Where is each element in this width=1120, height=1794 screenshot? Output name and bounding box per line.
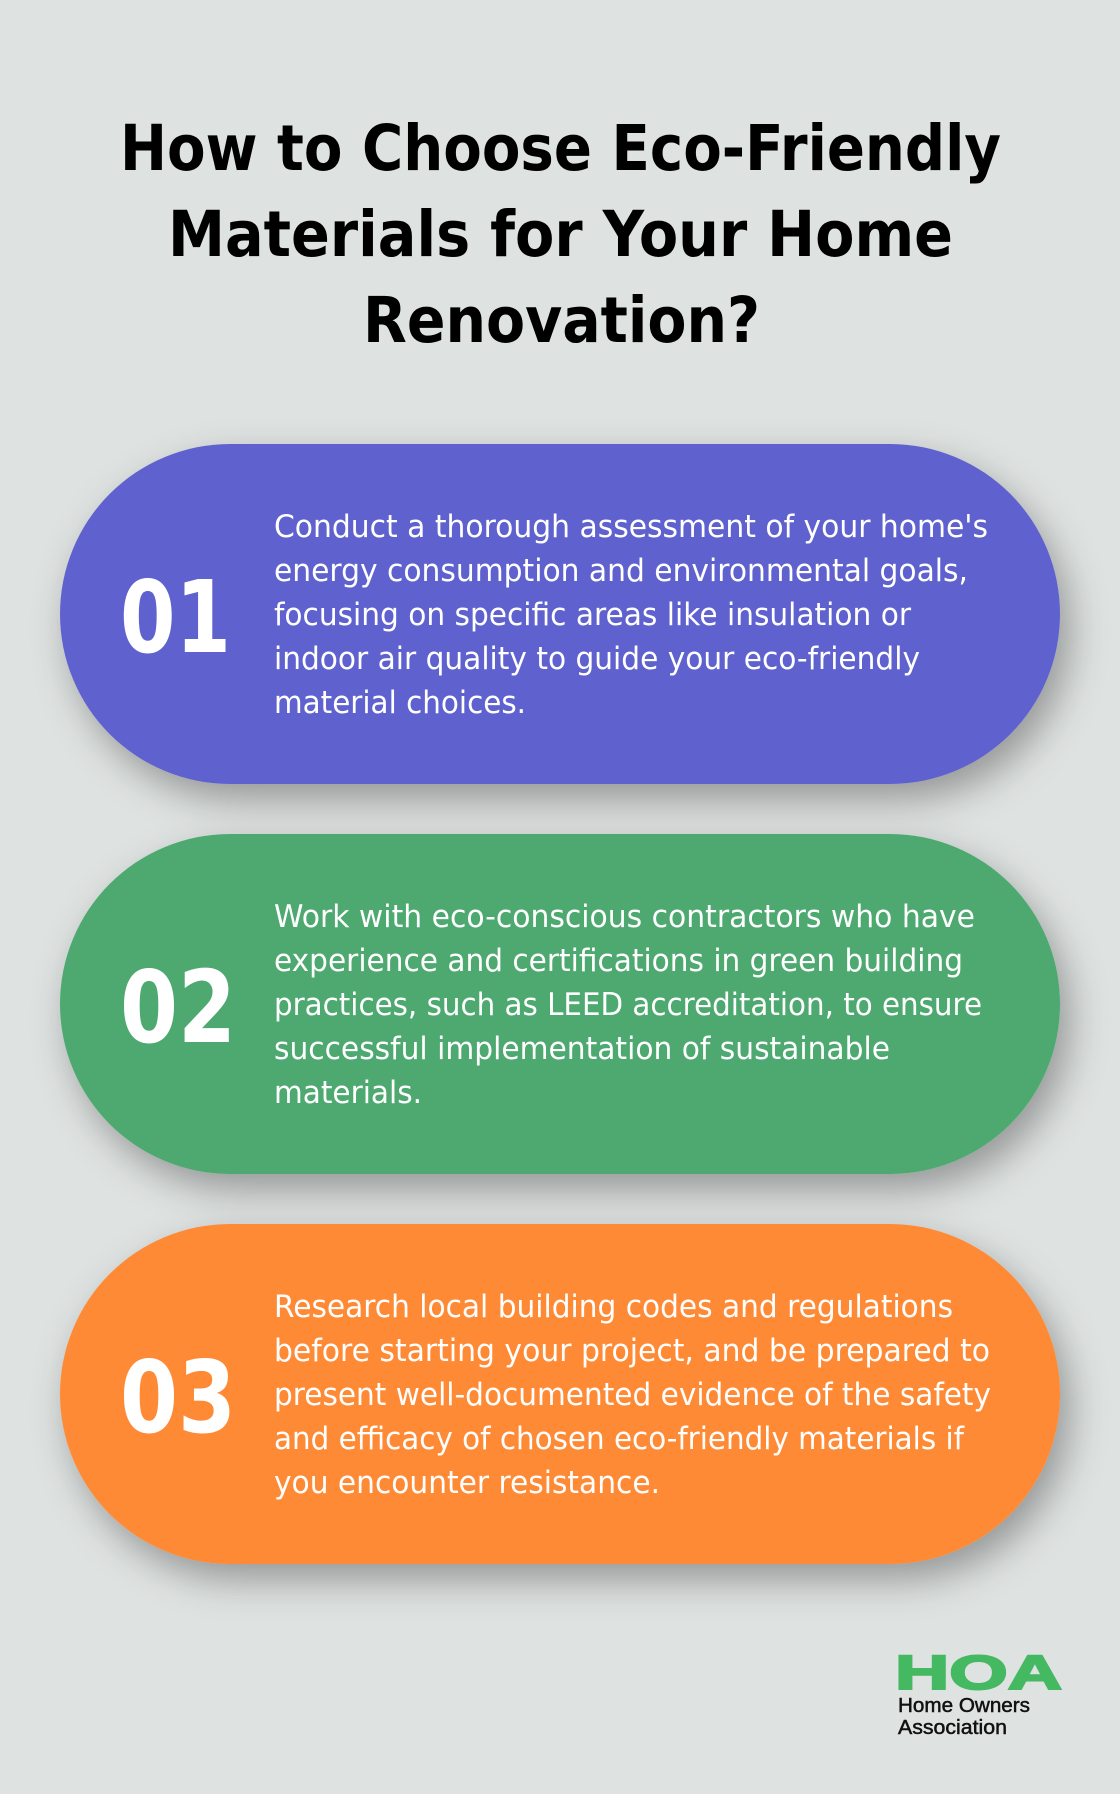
text: step 02 description: materials.: [274, 1075, 422, 1111]
text: step 03 description: and efficacy of chosen eco-friendly materials if: [274, 1421, 965, 1457]
text: step 03 description: present well-documented evidence of the safety: [274, 1377, 991, 1413]
text: step 01 description: energy consumption and environmental goals,: [274, 553, 968, 589]
panel: step 01: [60, 444, 1060, 784]
text: step 02 description: practices, such as LEED accreditation, to ensure: [274, 987, 982, 1023]
pill background: step 02: [60, 834, 1060, 1174]
panel: step 03: [60, 1224, 1060, 1564]
title: [120, 112, 1001, 357]
text: step 03 description: before starting your project, and be prepared to: [274, 1333, 990, 1369]
text: step 02 description: experience and certifications in green building: [274, 943, 963, 979]
text: step 03 description: Research local building codes and regulations: [274, 1289, 953, 1325]
title: Materials for Your Home: [168, 198, 953, 271]
number: 01: 01: [120, 559, 231, 676]
number: 02: 02: [120, 949, 236, 1066]
text: step 03 description: [274, 1289, 991, 1501]
text: step 01 description: [274, 509, 988, 721]
text: step 01 description: focusing on specific areas like insulation or: [274, 597, 911, 633]
text: step 01 description: material choices.: [274, 685, 526, 721]
logo: HOA Home Owners Association: Association: [898, 1717, 1007, 1739]
text: step 03 description: you encounter resistance.: [274, 1465, 660, 1501]
text: step 02 description: Work with eco-conscious contractors who have: [274, 899, 975, 935]
text: step 02 description: [274, 899, 982, 1111]
pill background: step 03: [60, 1224, 1060, 1564]
text: step 01 description: Conduct a thorough assessment of your home's: [274, 509, 988, 545]
title: Renovation?: [363, 284, 760, 357]
panel: step 02: [60, 834, 1060, 1174]
text: step 02 description: successful implementation of sustainable: [274, 1031, 890, 1067]
pill background: step 01: [60, 444, 1060, 784]
logo: HOA Home Owners Association: [895, 1647, 1062, 1739]
logo: HOA Home Owners Association: Home Owners: [898, 1695, 1030, 1717]
number: 03: 03: [120, 1339, 236, 1456]
logo: HOA Home Owners Association: HOA: [895, 1647, 1062, 1700]
title: How to Choose Eco-Friendly: [120, 112, 1001, 185]
text: step 01 description: indoor air quality to guide your eco-friendly: [274, 641, 920, 677]
